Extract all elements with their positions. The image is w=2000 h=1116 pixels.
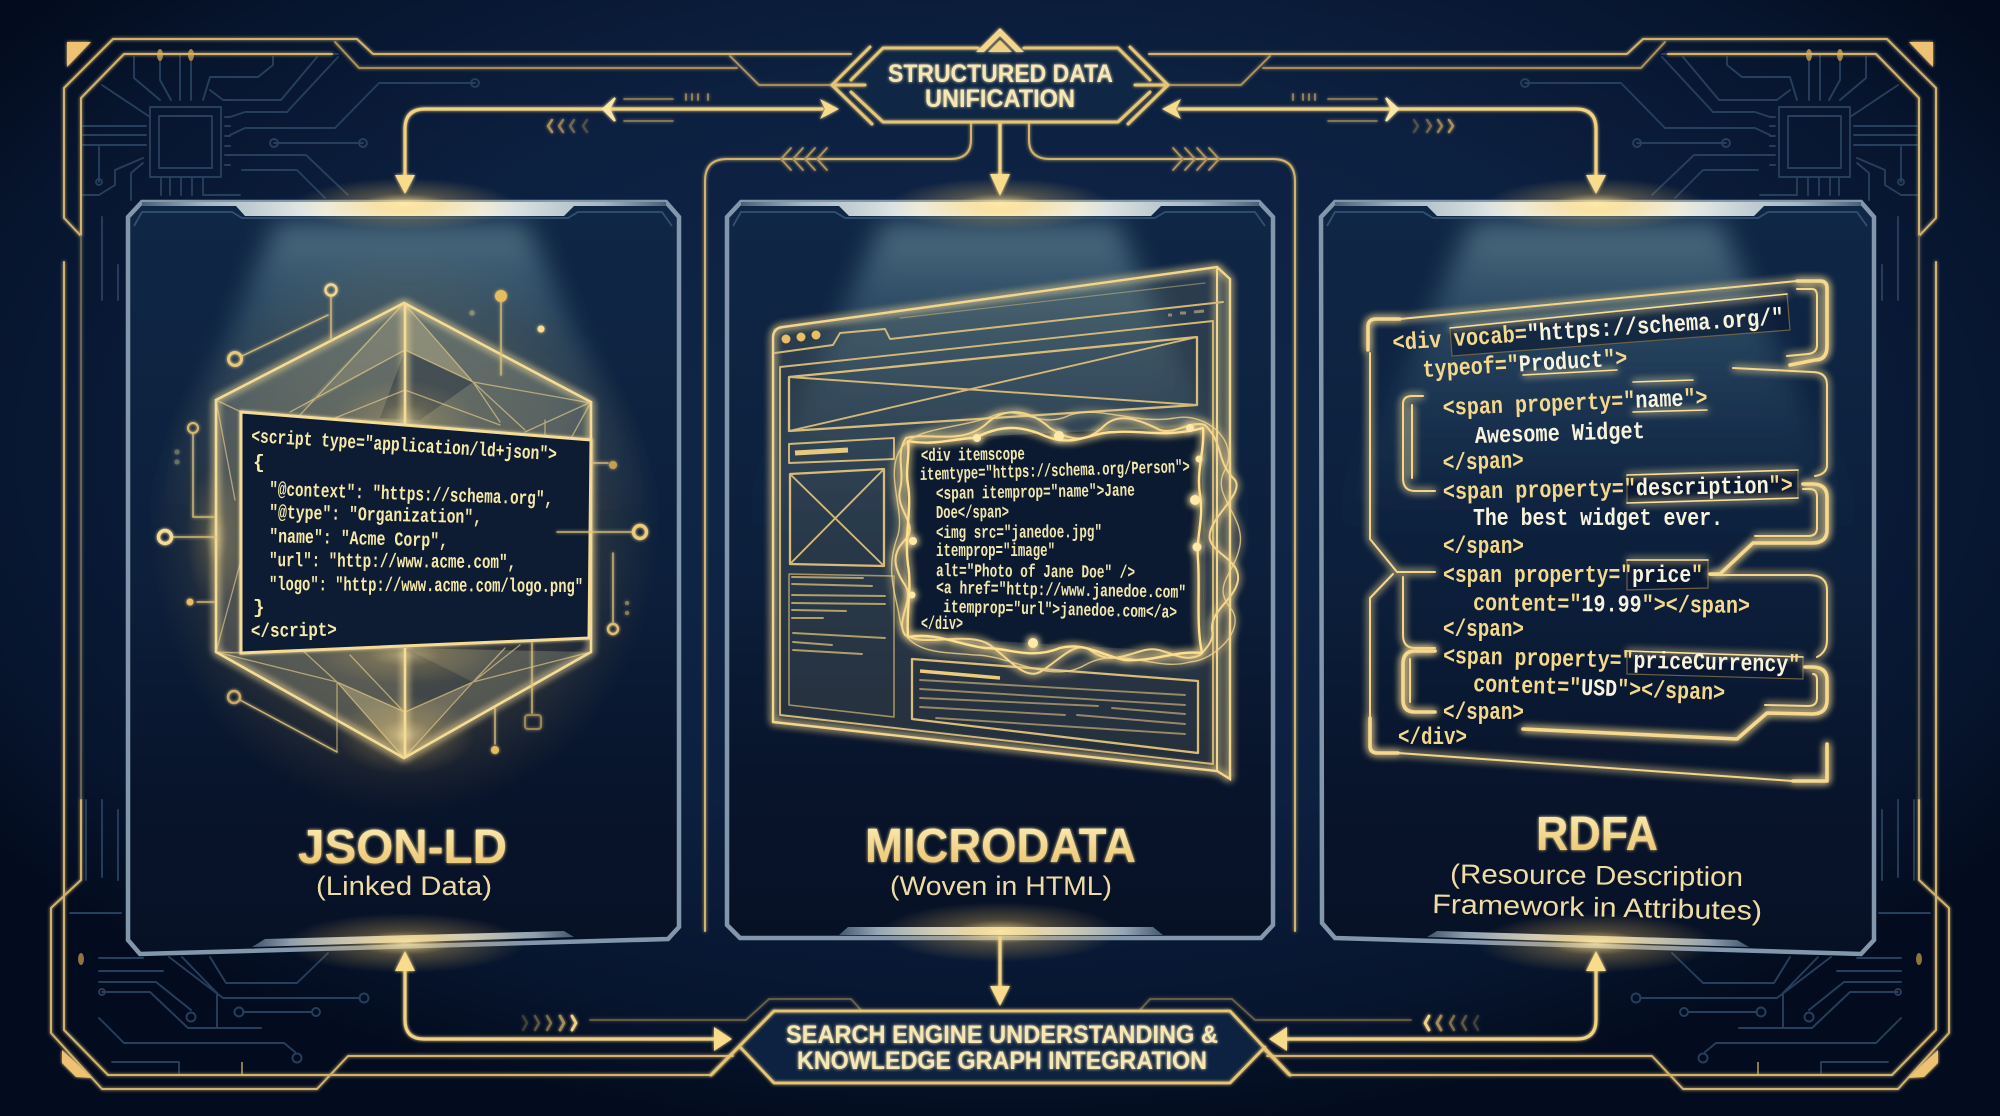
code: microdata: <span itemprop="name">Jane bbox=[936, 482, 1135, 505]
light cone: Microdata bbox=[740, 222, 1260, 540]
code: JSON-LD script: "@type": "Organization", bbox=[269, 502, 482, 529]
code: RDFa: <span property="description"> bbox=[1443, 473, 1793, 507]
sidebar title bbox=[789, 438, 894, 463]
code: RDFa: </span> bbox=[1443, 700, 1524, 727]
image placeholder bbox=[790, 469, 884, 566]
subtitle: RDFa: (Resource Description bbox=[1450, 859, 1743, 892]
sidebar text bbox=[789, 574, 894, 717]
header text: STRUCTURED DATA bbox=[888, 60, 1113, 88]
code: RDFa: </span> bbox=[1443, 617, 1524, 644]
woven threads bbox=[892, 412, 1240, 674]
light cone: JSON-LD bbox=[140, 222, 670, 540]
icon: RDFa code with brackets bbox=[1368, 281, 1827, 781]
light cone: RDFa bbox=[1330, 222, 1865, 540]
code: JSON-LD script: <script type="application/ld+json"> bbox=[251, 426, 557, 466]
glows on panel edges bbox=[285, 178, 1716, 973]
top bar: Microdata bbox=[741, 202, 1259, 216]
browser body bbox=[773, 267, 1230, 779]
browser outline bbox=[773, 267, 1230, 779]
circuit decoration: top right bbox=[1521, 49, 1917, 300]
panel: JSON-LD bbox=[128, 202, 679, 954]
bottom bar: JSON-LD bbox=[252, 931, 574, 947]
code: microdata: Doe</span> bbox=[936, 503, 1009, 524]
subtitle: Microdata: (Woven in HTML) bbox=[890, 871, 1112, 901]
banner placeholder bbox=[789, 337, 1197, 431]
arrow: RDFa to search engine bbox=[1140, 951, 1606, 1051]
code: JSON-LD script: "name": "Acme Corp", bbox=[269, 526, 448, 553]
title: Microdata: MICRODATA bbox=[865, 820, 1136, 873]
code: RDFa: </div> bbox=[1398, 725, 1467, 752]
header text: UNIFICATION bbox=[925, 85, 1075, 113]
subtitle: JSON-LD: (Linked Data) bbox=[316, 871, 492, 901]
code: RDFa: typeof="Product"> bbox=[1422, 346, 1628, 385]
subtitle: RDFa: Framework in Attributes) bbox=[1432, 889, 1762, 926]
bracket lines bbox=[1368, 281, 1827, 781]
code: RDFa: Awesome Widget bbox=[1474, 419, 1645, 451]
footer text: KNOWLEDGE GRAPH INTEGRATION bbox=[797, 1047, 1207, 1075]
panel: Microdata bbox=[727, 202, 1273, 938]
panel: RDFa bbox=[1321, 202, 1874, 954]
microdata code panel bbox=[906, 426, 1203, 653]
crystal outline bbox=[216, 303, 591, 758]
code: JSON-LD script: } bbox=[253, 597, 265, 619]
crystal facets bbox=[186, 303, 591, 775]
icon: browser wireframe with microdata code bbox=[773, 267, 1240, 779]
code: RDFa: <span property="name"> bbox=[1442, 386, 1708, 423]
browser tab bar bbox=[775, 283, 1223, 353]
header text bbox=[888, 60, 1113, 113]
footer: search engine understanding bbox=[711, 1011, 1290, 1083]
frame: left side bbox=[51, 39, 851, 1089]
code: RDFa: </span> bbox=[1442, 448, 1524, 478]
code: RDFa: content="USD"></span> bbox=[1473, 672, 1726, 708]
title: JSON-LD: JSON-LD bbox=[298, 821, 507, 874]
code: microdata: itemprop="url">janedoe.com</a> bbox=[943, 598, 1177, 624]
code: microdata: <a href="http://www.janedoe.com" bbox=[936, 579, 1186, 604]
circuit decoration: bottom right bbox=[1632, 800, 1930, 1075]
code panel: JSON-LD bbox=[241, 412, 591, 653]
arrow: JSON-LD to search engine bbox=[395, 951, 861, 1051]
bottom bar: Microdata bbox=[839, 927, 1163, 935]
code: microdata: itemtype="https://schema.org/Person"> bbox=[920, 458, 1190, 486]
bottom bar: RDFa bbox=[1427, 931, 1749, 947]
code: JSON-LD script: { bbox=[253, 452, 265, 474]
code: RDFa: content="19.99"></span> bbox=[1473, 591, 1750, 621]
code: RDFa: The best widget ever. bbox=[1473, 506, 1723, 533]
code: microdata: itemprop="image" bbox=[936, 542, 1055, 562]
arrow: Microdata to search engine bbox=[990, 938, 1010, 1006]
code: microdata: alt="Photo of Jane Doe" /> bbox=[936, 562, 1135, 584]
connector lines to central panel bbox=[705, 124, 1295, 931]
code: RDFa: <span property="priceCurrency" bbox=[1443, 644, 1800, 680]
top bar: RDFa bbox=[1335, 202, 1861, 216]
code: JSON-LD script bbox=[251, 426, 583, 643]
code: RDFa: <div vocab="https://schema.org/" bbox=[1392, 305, 1785, 358]
code: JSON-LD script: "url": "http://www.acme.com", bbox=[269, 550, 516, 574]
icon: JSON-LD crystal with code bbox=[149, 245, 659, 815]
code: microdata: <img src="janedoe.jpg" bbox=[936, 523, 1102, 544]
code: JSON-LD script: "@context": "https://schema.org", bbox=[269, 479, 553, 511]
circuit decoration: bottom left bbox=[70, 800, 368, 1075]
title: RDFa: RDFA bbox=[1536, 808, 1658, 861]
code: RDFa bbox=[1392, 305, 1800, 752]
browser inner frame bbox=[780, 321, 1213, 764]
arrow: header to Microdata bbox=[990, 122, 1010, 196]
crystal internal lines bbox=[216, 303, 591, 758]
footer text bbox=[786, 1021, 1218, 1075]
arrow: header to JSON-LD bbox=[395, 94, 839, 194]
code: RDFa: <span property="price" bbox=[1443, 563, 1703, 590]
subtitle: RDFa bbox=[1432, 859, 1762, 926]
footer text: SEARCH ENGINE UNDERSTANDING & bbox=[786, 1021, 1218, 1049]
bottom content block bbox=[912, 659, 1198, 753]
header outline bbox=[832, 28, 1168, 124]
frame: right side bbox=[1149, 39, 1949, 1089]
code: microdata: </div> bbox=[921, 615, 963, 635]
code: microdata: <div itemscope bbox=[921, 445, 1025, 467]
crystal satellite nodes bbox=[158, 284, 646, 754]
arrow: header to RDFa bbox=[1162, 94, 1606, 194]
code: JSON-LD script: </script> bbox=[251, 620, 337, 643]
code: microdata bbox=[920, 445, 1190, 635]
code: RDFa: </span> bbox=[1443, 534, 1524, 561]
highlight boxes bbox=[1450, 294, 1803, 679]
header: structured data unification bbox=[832, 28, 1168, 124]
circuit decoration: top left bbox=[83, 49, 479, 300]
top bar: JSON-LD bbox=[142, 202, 666, 216]
footer outline bbox=[711, 1011, 1290, 1083]
code: JSON-LD script: "logo": "http://www.acme.com/logo.png" bbox=[269, 574, 583, 598]
